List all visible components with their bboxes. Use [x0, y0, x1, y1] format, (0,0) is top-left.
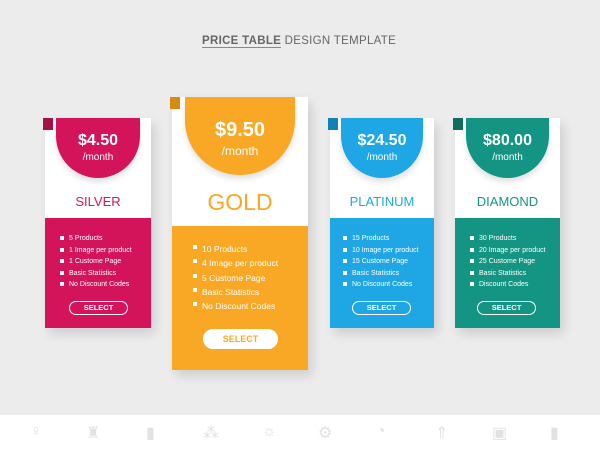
features: diamond: 30 Products — [479, 235, 516, 242]
features: silver: 5 Products — [69, 235, 102, 242]
price circle: platinum: /month — [367, 152, 397, 163]
features: gold: Basic Statistics — [202, 287, 259, 297]
price circle: gold: /month — [222, 144, 258, 158]
price circle: platinum — [341, 118, 423, 178]
features: diamond: SELECT — [492, 303, 521, 312]
plan name: diamond: DIAMOND — [477, 194, 538, 209]
panel: gold — [172, 97, 308, 370]
features: platinum: 10 Image per product — [352, 246, 419, 254]
plan name: gold: GOLD — [207, 189, 273, 215]
price circle: gold: $9.50 — [215, 119, 265, 141]
features: silver: 1 Custome Page — [69, 258, 121, 265]
features: platinum: 15 Custome Page — [352, 258, 408, 265]
features: gold: 4 Image per product — [202, 258, 278, 268]
features: platinum — [330, 218, 434, 328]
features: silver — [45, 218, 151, 328]
features: silver: 1 Image per product — [69, 246, 132, 254]
features: diamond: 20 Image per product — [479, 246, 546, 254]
features: diamond — [455, 218, 560, 328]
plan name: platinum: PLATINUM — [350, 194, 414, 209]
price circle: diamond: $80.00 — [483, 132, 532, 149]
plan name: silver: SILVER — [75, 194, 121, 209]
features: platinum: 15 Products — [352, 235, 389, 242]
price circle: diamond — [466, 118, 549, 178]
features: diamond: Discount Codes — [479, 281, 528, 288]
features: gold — [172, 226, 308, 370]
price circle: silver: /month — [83, 152, 113, 163]
icon strip: ☼ — [262, 423, 277, 440]
price circle: diamond: /month — [492, 152, 523, 163]
price circle: silver: $4.50 — [78, 132, 118, 149]
icon strip: ♀ — [30, 423, 42, 440]
title: PRICE TABLE DESIGN TEMPLATE — [202, 35, 396, 47]
features: platinum: Basic Statistics — [352, 270, 399, 276]
features: gold: No Discount Codes — [202, 301, 275, 311]
icon strip: ◔ — [376, 423, 386, 440]
price circle: silver — [56, 118, 140, 178]
features: platinum: SELECT — [367, 303, 396, 312]
features: gold: 5 Custome Page — [202, 273, 265, 283]
features: gold: 10 Products — [202, 244, 247, 254]
features: silver: No Discount Codes — [69, 281, 129, 288]
price circle: gold — [185, 97, 295, 175]
icon strip: ▣ — [492, 425, 507, 442]
icon strip: ⚙ — [318, 425, 332, 442]
panel: platinum — [330, 118, 434, 328]
price circle: platinum: $24.50 — [358, 132, 406, 149]
features: platinum: No Discount Codes — [352, 281, 412, 288]
icon strip: ♜ — [86, 425, 100, 442]
panel: silver — [45, 118, 151, 328]
panel: diamond — [455, 118, 560, 328]
icon strip — [0, 415, 600, 450]
features: diamond: Basic Statistics — [479, 270, 526, 276]
icon strip: ▮ — [146, 425, 155, 442]
icon strip: ▮ — [550, 425, 559, 442]
features: gold: SELECT — [223, 334, 258, 344]
features: silver: SELECT — [84, 303, 113, 312]
features: diamond: 25 Custome Page — [479, 258, 535, 265]
icon strip: ⇑ — [435, 425, 448, 442]
icon strip: ⁂ — [203, 425, 219, 442]
features: silver: Basic Statistics — [69, 270, 116, 276]
